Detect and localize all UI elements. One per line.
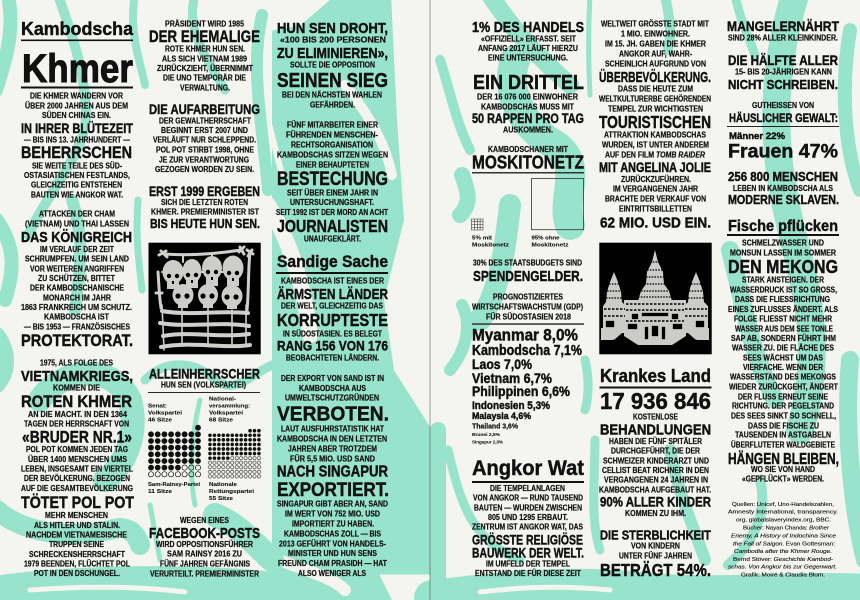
legend: Nationale Rettungspartei: 55 Sitze — [209, 496, 233, 502]
text block: sources and credits: Quellen: Unicef, Uno-Handelszahlen, — [732, 502, 835, 508]
text block: Bestechung: SEIT ÜBER EINEM JAHR IN — [287, 188, 378, 197]
legend: Nationalversammlung seats: 68 Sitze — [209, 418, 233, 424]
list: growth by country, sized by value: Brunei 2,5% — [472, 432, 500, 437]
text block: Sandexport: UMWELTSCHUTZGRÜNDEN — [285, 394, 379, 403]
text block: Angkor Wat temples: BAUWERK DER WELT. — [472, 544, 584, 560]
text block: Mekong: MONSUN LASSEN IM SOMMER — [730, 248, 836, 257]
text block: Mekong: DER FLUSS ERNEUT SEINE — [738, 392, 828, 401]
text block: sources and credits: Bücher: Nayan Chanda: Brother — [743, 525, 829, 531]
text block: die Aufarbeitung: POL POT STIRBT 1998, OHNE — [156, 146, 254, 155]
legend: Sam-Rainsy-Partei — [148, 482, 201, 495]
text block: Mangelernährt — [727, 18, 839, 43]
text block: Vietnam war and Red Khmer: ÜBER 1400 MENSCHEN UMS — [28, 455, 127, 464]
text block: Angkor Wat temples — [472, 484, 584, 578]
text block: der ehemalige: DER EHEMALIGE — [149, 27, 260, 46]
text block: Mekong: WO SIE VON HAND — [751, 465, 815, 474]
legend: Nationalversammlung seats: versammlung: — [209, 404, 250, 410]
text block: Angkor Wat temples: BAUTEN — WURDEN ZWISCHEN — [474, 503, 582, 512]
text block: Beat Richner hospitals — [599, 388, 711, 518]
panel: mosquito nets — [472, 145, 584, 249]
text block: Mekong: RICHTUNG. DER PEGELSTAND — [732, 402, 834, 411]
legend: Sam-Rainsy-Partei: 11 Sitze — [148, 489, 172, 495]
text block: Angkor and tourism: WELTWEIT GRÖSSTE STADT MIT — [601, 20, 709, 29]
list: growth by country, sized by value: Indonesien 5,3% — [472, 400, 550, 412]
text block: origins of the Khmer: SÜDEN CHINAS EIN. — [42, 111, 111, 120]
text block: Mekong: WASSERSTAND DES MEKONGS — [730, 373, 836, 382]
text block: Korruption: DER WELT, GLEICHZEITIG DAS — [281, 302, 383, 311]
text block: Beat Richner hospitals: 90% ALLER KINDER — [600, 494, 711, 510]
heading: Moskitonetz: KAMBODSCHANER MIT — [488, 145, 568, 154]
column 5: Angkor tourism and Krankes Land — [599, 20, 712, 580]
text block: Angkor and tourism: 1 MIO. EINWOHNER. — [621, 30, 690, 39]
text block: Mangelernährt: MANGELERNÄHRT — [727, 18, 839, 34]
text block: Facebook-Posts — [149, 516, 260, 578]
text block: Ein Drittel: DER 16 076 000 EINWOHNER — [477, 92, 578, 101]
text block: Angkor Wat temples: ENTSTAND DIE FÜR DIESE ZEIT — [475, 569, 581, 578]
text block: die Aufarbeitung: DIE AUFARBEITUNG — [149, 101, 260, 117]
text block: Bestechung: FÜNF MITARBEITER EINER — [287, 121, 378, 130]
text block: origins of the Khmer: BAUTEN WIE ANGKOR WAT. — [31, 190, 123, 199]
heading: Kambodscha: Kambodscha — [21, 19, 134, 39]
panel: GDP growth forecast — [472, 292, 584, 444]
text block: Vietnam war and Red Khmer: MEHR MENSCHEN — [45, 511, 108, 520]
text block: Facebook-Posts: WIRD OPPOSITIONSFÜHRER — [156, 540, 253, 549]
list: growth by country, sized by value: Philippinen 6,6% — [472, 384, 570, 399]
text block: Mekong: TAUSENDEN IN ASTGABELN — [735, 431, 831, 440]
text block: sources and credits: the Fall of Saigon. Evan Gottesman: — [733, 541, 835, 547]
text block: Mekong: SEES WÄCHST UM DAS — [743, 353, 823, 362]
text block: Angkor Wat temples: 805 UND 1295 ERBAUT. — [488, 513, 568, 522]
text block: shrinking kingdom: MONARCH IM JAHR — [43, 293, 111, 302]
text block: origins of the Khmer: SIE WEITE TEILE DES SÜD- — [32, 162, 122, 170]
text block: Die Hälfte aller: DIE HÄLFTE ALLER — [728, 52, 838, 68]
big number: treatments: 17 936 846 — [600, 388, 711, 414]
heading: Alleinherrscher: ALLEINHERRSCHER — [149, 366, 260, 382]
text block: Hun Sen droht: GEFÄHRDEN. — [310, 101, 355, 110]
text block: child mortality: UNTER FÜNF JAHREN — [619, 551, 692, 560]
text block: Bestechung: SEIT 1992 IST DER MORD AN ACHT — [276, 208, 388, 217]
text block: Hun Sen droht: ZU ELIMINIEREN», — [277, 45, 388, 62]
illustration: Angkor Wat temple — [599, 243, 712, 354]
text block: Vietnam war and Red Khmer: LEBEN, INSGESAMT EIN VIERTEL — [21, 464, 133, 474]
text block: Angkor Wat temples: ZENTRUM IST ANGKOR WAT, DAS — [472, 523, 583, 532]
text block: Ein Drittel: AUSKOMMEN. — [503, 126, 553, 135]
legend: Senat seats: Volkspartei — [148, 411, 183, 417]
text block: Korruption: IN SÜDOSTASIEN. ES BELEGT — [283, 329, 382, 338]
text block: Angkor and tourism: DASS DIE HEUTE ZUM — [618, 85, 693, 94]
text block: 1% des Handels: ANFANG 2017 LÄUFT HIERZU — [478, 44, 578, 53]
text block: origins of the Khmer: ÜBER 2000 JAHREN AUS DEM — [25, 102, 128, 110]
panel: GDP growth forecast: PROGNOSTIZIERTES — [493, 292, 563, 301]
panel: domestic violence approval: Frauen 47% — [728, 141, 838, 163]
text block: Sandexport: EXPORTIERT. — [277, 479, 389, 501]
text block: Sandexport: DER EXPORT VON SAND IST IN — [281, 374, 384, 383]
panel: Alleinherrscher parliament seats — [148, 366, 261, 502]
text block: Vietnam war and Red Khmer: «BRUDER NR.1» — [22, 428, 132, 446]
text block: Sandexport: 2013 GEFÜHRT VON HANDELS- — [279, 539, 386, 548]
text block: die Aufarbeitung: BEGINNT ERST 2007 UND — [161, 126, 248, 135]
legend: 5% mit Moskitonetz: Moskitonetz — [472, 243, 509, 249]
text block: Korruption: KORRUPTESTE — [277, 310, 388, 330]
text block: Vietnam war and Red Khmer: TAGEN DER HERRSCHAFT VON — [24, 420, 129, 428]
text block: Mekong: «GEPFLÜCKT» WERDEN. — [742, 475, 824, 484]
text block: Angkor and tourism: ZURÜCKZUFÜHREN. — [621, 175, 691, 184]
text block: shrinking kingdom — [21, 210, 133, 350]
text block: Angkor Wat temples: DIE TEMPELANLAGEN — [490, 484, 565, 493]
text block: Sandexport: NACH SINGAPUR — [277, 464, 388, 481]
text block: Mekong: STARK ANSTEIGEN. DER — [742, 276, 824, 285]
text block: Angkor and tourism: BRACHTE DER VERKAUF VON — [605, 195, 706, 204]
legend: Nationalversammlung seats — [209, 397, 250, 424]
heading: Angkor Wat: Angkor Wat — [472, 456, 584, 480]
text block: Korruption: BEOBACHTETEN LÄNDERN. — [286, 353, 379, 362]
text block: Angkor Wat temples: VON ANGKOR — RUND TAUSEND — [473, 494, 583, 503]
text block: Sandexport — [277, 374, 389, 578]
list: growth by country, sized by value: Kambodscha 7,1% — [472, 342, 582, 359]
text block: Ein Drittel — [472, 72, 584, 135]
text block: Angkor and tourism: ANGKOR AUF, WAHR- — [619, 50, 692, 59]
text block: Hun Sen droht: BEI DEN NÄCHSTEN WAHLEN — [282, 91, 382, 100]
text block: Facebook-Posts: SAM RAINSY 2016 ZU — [167, 550, 242, 559]
text block: Facebook-Posts: FÜNF JAHREN GEFÄNGNIS — [160, 560, 250, 569]
text block: Hun Sen droht: HUN SEN DROHT, — [277, 20, 388, 37]
text block: Bestechung: UNAUFGEKLÄRT. — [304, 234, 361, 243]
panel: domestic violence approval: GUTHEISSEN VON — [752, 101, 814, 110]
text block: shrinking kingdom: IM VERLAUF DER ZEIT — [40, 245, 114, 254]
list: growth by country, sized by value: Laos 7,0% — [472, 356, 532, 372]
text block: die Aufarbeitung: JE ZUR VERANTWORTUNG — [159, 155, 249, 164]
text block: shrinking kingdom: DER KAMBODSCHANISCHE — [30, 284, 124, 293]
text block: Beat Richner hospitals: BEHANDLUNGEN — [600, 422, 711, 438]
text block: Beat Richner hospitals: KAMBODSCHA AUFGEBAUT HAT. — [599, 485, 711, 494]
text block: Mekong: SCHMELZWASSER UND — [742, 239, 824, 248]
text block: Vietnam war and Red Khmer: ROTEN KHMER — [21, 392, 132, 411]
text block: die Aufarbeitung — [149, 101, 260, 174]
text block: Spendengelder — [473, 259, 583, 285]
legend: 95% ohne Moskitonetz: Moskitonetz — [532, 243, 569, 249]
text block: shrinking kingdom: ATTACKEN DER CHAM — [39, 210, 115, 219]
text block: origins of the Khmer — [21, 92, 133, 199]
text block: sources and credits — [728, 502, 838, 579]
text block: origins of the Khmer: GLEICHZEITIG ENTSTEHEN — [31, 181, 122, 190]
legend: 95% ohne Moskitonetz — [532, 236, 569, 249]
panel: domestic violence approval: Männer 22% — [729, 131, 786, 142]
text block: 1% des Handels: EINE UNTERSUCHUNG. — [488, 54, 568, 63]
text block: der ehemalige: ALS SICH VIETNAM 1989 — [162, 54, 248, 63]
text block: Angkor and tourism: AUF DEN FILM TOMB RAIDER — [605, 151, 705, 160]
text block: Mekong: DEN MEKONG — [728, 256, 838, 277]
text block: Bestechung: RECHTSORGANISATION — [291, 141, 373, 150]
text block: 1% des Handels — [472, 19, 584, 63]
text block: Vietnam war and Red Khmer: ALS HITLER UND STALIN. — [34, 521, 120, 530]
text block: Bestechung: JOURNALISTEN — [277, 216, 388, 236]
text block: die Aufarbeitung: GEZOGEN WORDEN ZU SEIN. — [155, 165, 254, 174]
text block: Angkor and tourism: SCHEINLICH AUFGRUND VON — [605, 59, 706, 68]
text block: shrinking kingdom: — BIS 1953 — FRANZÖSISCHES — [24, 322, 130, 331]
panel: GDP growth forecast: FÜR SÜDOSTASIEN 2018 — [486, 312, 572, 321]
text block: Mekong: WIEDER ZURÜCKGEHT, ÄNDERT — [729, 382, 838, 391]
text block: shrinking kingdom: KAMBODSCHA IST — [44, 313, 109, 322]
text block: Mekong: SAP AB, SONDERN FÜHRT IHM — [731, 334, 836, 343]
text block: Vietnam war and Red Khmer: TÖTET POL POT — [21, 493, 135, 512]
text block: Erst 1999: KHMER. PREMIERMINISTER IST — [151, 208, 259, 217]
text block: origins of the Khmer: OSTASIATISCHEN FESTLANDS, — [24, 171, 130, 180]
text block: Hun Sen droht: SOLLTE DIE OPPOSITION — [290, 61, 375, 70]
text block: Vietnam war and Red Khmer: AUF DIE GESAMTBEVÖLKERUNG — [21, 484, 133, 493]
text block: Angkor and tourism: IM VERGANGENEN JAHR — [613, 185, 698, 194]
text block: Mekong: DES SEES SINKT SO SCHNELL, — [731, 412, 836, 421]
text block: Vietnam war and Red Khmer: VIETNAMKRIEGS, — [21, 368, 133, 385]
text block: Angkor and tourism: EINTRITTSBILLETTEN — [619, 205, 692, 214]
text block: sources and credits: Amnesty International, transparency. — [728, 510, 838, 516]
text block: Vietnam war and Red Khmer: SCHRECKENSHERRSCHAFT — [29, 550, 125, 559]
text block: Vietnam war and Red Khmer: POL POT KOMMEN JEDEN TAG — [26, 445, 128, 454]
text block: Mekong: WASSER AUS DEM SEE TONLE — [735, 324, 833, 333]
text block: Facebook-Posts: WEGEN EINES — [180, 516, 229, 525]
text block: der ehemalige — [149, 19, 260, 93]
text block: Spendengelder: SPENDENGELDER. — [473, 268, 583, 285]
text block: Vietnam war and Red Khmer: NACHDEM VIETNAMESISCHE — [26, 530, 127, 540]
text block: Mangelernährt: SIND 28% ALLER KLEINKINDER. — [728, 34, 838, 43]
text block: modern slaves: MODERNE SKLAVEN. — [728, 192, 839, 207]
heading: Fische pflücken: Fische pflücken — [728, 218, 838, 235]
text block: Beat Richner hospitals: VERGANGENEN 24 JAHREN IN — [604, 476, 708, 485]
text block: origins of the Khmer: — BIS INS 13. JAHRHUNDERT — — [24, 136, 130, 144]
legend: 5% mit Moskitonetz — [472, 236, 509, 249]
text block: Mekong: VIERFACHE. WENN DER — [743, 363, 823, 372]
text block: 1% des Handels: 1% DES HANDELS — [472, 19, 584, 36]
text block: Korruption: ÄRMSTEN LÄNDER — [277, 286, 388, 303]
text block: child mortality: BETRÄGT 54%. — [600, 560, 711, 580]
text block: modern slaves — [728, 169, 839, 207]
text block: Die Hälfte aller — [728, 52, 838, 92]
text block: Erst 1999 — [149, 184, 260, 231]
text block: Korruption — [277, 277, 388, 362]
text block: Mekong — [728, 239, 839, 484]
text block: Angkor Wat temples: IM UMFELD DER TEMPEL — [486, 560, 570, 569]
text block: Ein Drittel: 50 RAPPEN PRO TAG — [472, 111, 584, 126]
text block: Bestechung: UNTERSUCHUNGSHAFT. — [290, 198, 374, 207]
text block: Sandexport: KAMBODSCHA IN DEN LETZTEN — [277, 435, 387, 444]
text block: Mekong: DASS DIE FISCHE ZU — [748, 421, 819, 430]
text block: Korruption: RANG 156 VON 176 — [277, 338, 388, 354]
legend: Nationale Rettungspartei: Rettungspartei — [209, 489, 255, 495]
text block: Die Hälfte aller: 15- BIS 20-JÄHRIGEN KANN — [735, 68, 832, 77]
text block: Vietnam war and Red Khmer: AN DIE MACHT. IN DEN 1364 — [28, 410, 128, 419]
text block: Vietnam war and Red Khmer: 1979 BEENDEN, FLÜCHTET POL — [24, 560, 130, 568]
text block: die Aufarbeitung: DER GEWALTHERRSCHAFT — [159, 116, 251, 125]
text block: Sandexport: SINGAPUR GIBT ABER AN, SAND — [277, 500, 388, 509]
text block: der ehemalige: PRÄSIDENT WIRD 1985 — [165, 19, 245, 28]
list: growth by country, sized by value: Vietnam 6,7% — [472, 370, 552, 386]
text block: sources and credits: Bernd Stöver: Geschichte Kambod- — [733, 557, 833, 563]
legend: 5% mit Moskitonetz: 5% mit — [472, 236, 492, 242]
text block: Vietnam war and Red Khmer: POT IN DEN DSCHUNGEL. — [34, 569, 120, 578]
text block: shrinking kingdom: (VIETNAM) UND THAI LASSEN — [25, 219, 129, 228]
text block: Angkor and tourism: ATTRAKTION KAMBODSCHAS — [604, 131, 706, 140]
text block: Beat Richner hospitals: HABEN DIE FÜNF SPITÄLER — [609, 437, 702, 446]
text block: modern slaves: LEBEN IN KAMBODSCHA ALS — [733, 184, 833, 193]
text block: sources and credits: schas. Von Angkor bis zur Gegenwart. — [728, 565, 837, 571]
column 6: social statistics, Fische pflücken, sources — [727, 18, 839, 579]
text block: child mortality: DIE STERBLICHKEIT — [600, 528, 711, 542]
text block: Mekong: WASSERDRUCK IST SO GROSS, — [730, 286, 837, 295]
text block: origins of the Khmer: IN IHRER BLÜTEZEIT — [21, 120, 133, 136]
text block: 1% des Handels: «OFFIZIELL» ERFASST. SEIT — [481, 34, 576, 43]
legend: Nationale Rettungspartei — [209, 482, 255, 502]
text block: Hun Sen droht — [277, 20, 388, 110]
text block: Beat Richner hospitals: CELLIST BEAT RICHNER IN DEN — [602, 466, 709, 475]
text block: Vietnam war and Red Khmer: DER BEVÖLKERUNG. BEZOGEN — [24, 474, 130, 483]
panel: mosquito nets: MOSKITONETZ — [472, 152, 584, 173]
text block: Bestechung: KAMBODSCHAS SITZEN WEGEN — [277, 151, 388, 160]
text block: Vietnam war and Red Khmer: KOMMEN DIE — [53, 384, 100, 392]
text block: shrinking kingdom: 1863 FRANKREICH UM SCHUTZ. — [21, 303, 132, 312]
text block: Beat Richner hospitals: SCHWEIZER KINDERARZT UND — [603, 456, 709, 465]
text block: Ein Drittel: EIN DRITTEL — [473, 72, 584, 94]
heading: Krankes Land: Krankes Land — [600, 365, 711, 386]
text block: Mekong: WASSER ZU. DIE FLÄCHE DES — [732, 344, 834, 353]
text block: Die Hälfte aller: NICHT SCHREIBEN. — [728, 77, 838, 92]
text block: Sandexport: LAUT AUSFUHRSTATISTIK HAT — [281, 425, 384, 434]
legend: 95% ohne Moskitonetz: 95% ohne — [532, 236, 560, 242]
text block: Angkor and tourism: TOURISTISCHEN — [599, 112, 711, 132]
text block: modern slaves: 256 800 MENSCHEN — [728, 169, 838, 184]
text block: Sandexport: ALSO WENIGER ALS — [298, 569, 366, 578]
text block: Sandexport: IMPORTIERT ZU HABEN. — [292, 520, 374, 529]
text block: shrinking kingdom: DAS KÖNIGREICH — [21, 229, 132, 246]
text block: shrinking kingdom: PROTEKTORAT. — [21, 331, 133, 350]
list: growth by country, sized by value — [472, 326, 582, 444]
list: growth by country, sized by value: Singapur 2,3% — [472, 440, 503, 444]
text block: sources and credits: org, globalslaveryindex.org, BBC. — [736, 518, 831, 524]
text block: Sandexport: FÜR 5,5 MIO. USD SAND — [290, 455, 375, 464]
text block: sources and credits: Cambodia after the Khmer Rouge. — [734, 549, 832, 555]
text block: die Aufarbeitung: VERLÄUFT NUR SCHLEPPEND. — [153, 136, 256, 145]
legend: Nationale Rettungspartei: Nationale — [209, 482, 237, 488]
illustration: skulls and bones — [148, 243, 261, 354]
legend: Senat seats — [148, 404, 183, 424]
text block: shrinking kingdom: SCHRUMPFEN. UM SEIN LAND — [25, 255, 129, 264]
text block: Ein Drittel: KAMBODSCHAS MUSS MIT — [481, 102, 574, 111]
text block: Angkor and tourism: TEMPEL ZUR WICHTIGSTEN — [608, 104, 703, 113]
text block: Bestechung — [276, 121, 388, 243]
chart: 95% without net square — [532, 178, 584, 230]
text block: Sandexport: VERBOTEN. — [277, 403, 389, 426]
text block: Mekong: FOLGE FLIESST NICHT MEHR — [734, 315, 832, 324]
text block: origins of the Khmer: DIE KHMER WANDERN VOR — [30, 92, 123, 101]
text block: Facebook-Posts: FACEBOOK-POSTS — [149, 525, 260, 542]
panel: GDP growth forecast: WIRTSCHAFTSWACHSTUM (GDP) — [472, 303, 583, 312]
text block: Erst 1999: SICH DIE LETZTEN ROTEN — [161, 198, 248, 207]
text block: der ehemalige: VERWALTUNG. — [180, 84, 230, 93]
text block: Erst 1999: BIS HEUTE HUN SEN. — [150, 216, 260, 231]
text block: Spendengelder: 30% DES STAATSBUDGETS SIND — [473, 259, 582, 268]
text block: child mortality: VON KINDERN — [631, 542, 680, 551]
column 3: repression and Sandige Sache — [276, 20, 389, 578]
panel: Alleinherrscher parliament seats: HUN SEN (VOLKSPARTEI) — [161, 381, 246, 390]
text block: Sandexport: KAMBODSCHAS ZOLL — BIS — [284, 530, 381, 539]
text block: Hun Sen droht: SEINEN SIEG — [277, 70, 388, 92]
text block: Mekong: DASS DIE FLIESSRICHTUNG — [735, 295, 830, 304]
text block: Bestechung: FÜHRENDEN MENSCHEN- — [286, 131, 378, 140]
legend: Senat seats: Senat: — [148, 404, 167, 410]
legend: Sam-Rainsy-Partei: Sam-Rainsy-Partei — [148, 482, 201, 488]
text block: Mekong: ÜBERFLUTETER WALDGEBIETE — [731, 441, 835, 450]
text block: Bestechung: EINER BEHAUPTETEN — [296, 161, 369, 170]
list: growth by country, sized by value: Malaysia 4,6% — [472, 411, 531, 421]
text block: shrinking kingdom: VOR WEITEREN ANGRIFFEN — [30, 264, 124, 273]
text block: Mekong: EINES ZUFLUSSES ÄNDERT. ALS — [728, 305, 838, 314]
legend: Nationalversammlung seats: Volkspartei — [209, 411, 244, 417]
text block: Beat Richner hospitals: KOSTENLOSE — [633, 413, 678, 422]
panel: domestic violence approval — [727, 101, 839, 163]
text block: Sandexport: IM WERT VON 752 MIO. USD — [285, 510, 380, 519]
column 2: Hun Sen and politics — [148, 19, 261, 578]
chart: 5% with net grid — [472, 219, 483, 230]
text block: Angkor and tourism: 62 MIO. USD EIN. — [600, 214, 711, 232]
text block: Korruption: KAMBODSCHA IST EINES DER — [281, 277, 384, 286]
text block: Sandexport: FREUND CHAM PRASIDH — HAT — [278, 559, 387, 568]
text block: Angkor and tourism: MIT ANGELINA JOLIE — [599, 159, 711, 175]
heading: Sandige Sache: Sandige Sache — [277, 252, 388, 271]
text block: Beat Richner hospitals: KOMMEN ZU IHM. — [625, 509, 686, 518]
text block: der ehemalige: ROTE KHMER HUN SEN. — [165, 45, 245, 54]
text block: Sandexport: MINISTER UND HUN SENS — [288, 549, 377, 558]
text block: shrinking kingdom: ZU SCHÜTZEN, BITTET — [38, 274, 115, 283]
text block: Beat Richner hospitals: DURCHGEFÜHRT, DIE DER — [611, 447, 700, 456]
text block: Vietnam war and Red Khmer: 1975, ALS FOLGE DES — [40, 359, 113, 368]
text block: Bestechung: BESTECHUNG — [277, 168, 388, 190]
text block: Angkor and tourism: WURDEN, IST UNTER ANDEREM — [602, 141, 709, 150]
text block: sources and credits: Enemy, A History of Indochina Since — [731, 533, 836, 539]
title: Khmer: Khmer — [22, 47, 133, 91]
text block: Angkor and tourism: IM 15. JH. GABEN DIE KHMER — [605, 40, 706, 49]
column 4: poverty, growth, Angkor Wat — [472, 19, 584, 578]
text block: Vietnam war and Red Khmer — [21, 359, 135, 578]
text block: Hun Sen droht: «100 BIS 200 PERSONEN — [280, 36, 386, 45]
text block: Angkor Wat temples: GRÖSSTE RELIGIÖSE — [472, 532, 583, 548]
legend: Nationalversammlung seats: National- — [209, 397, 236, 403]
text block: Erst 1999: ERST 1999 ERGEBEN — [149, 184, 260, 199]
list: growth by country, sized by value: Thailand 3,6% — [472, 423, 519, 430]
text block: origins of the Khmer: BEHERRSCHEN — [21, 143, 132, 162]
text block: child mortality — [600, 528, 711, 580]
text block: Angkor and tourism: ÜBERBEVÖLKERUNG. — [599, 69, 711, 86]
text block: Angkor and tourism — [599, 20, 711, 232]
dot chart: Senat 46 filled 11 open — [148, 425, 201, 477]
text block: der ehemalige: DIE UNO TEMPORÄR DIE — [163, 74, 246, 83]
text block: der ehemalige: ZURÜCKZIEHT, ÜBERNIMMT — [157, 64, 253, 73]
text block: Sandexport: JAHREN ABER TROTZDEM — [288, 445, 377, 454]
list: growth by country, sized by value: Myanmar 8,0% — [472, 326, 578, 344]
text block: Sandexport: KAMBODSCHA AUS — [299, 384, 366, 393]
dot chart: Nationalversammlung 68 filled 55 open — [208, 431, 261, 479]
column 1: Khmer history — [21, 19, 135, 578]
legend: Senat seats: 46 Sitze — [148, 418, 172, 424]
text block: Facebook-Posts: VERURTEILT. PREMIERMINISTER — [150, 569, 259, 578]
text block: Vietnam war and Red Khmer: TRUPPEN SEINE — [49, 540, 104, 549]
text block: sources and credits: Grafik: Moiré & Claudia Blum. — [741, 573, 825, 579]
text block: Angkor and tourism: WELTKULTURERBE GEHÖRENDEN — [599, 94, 711, 103]
